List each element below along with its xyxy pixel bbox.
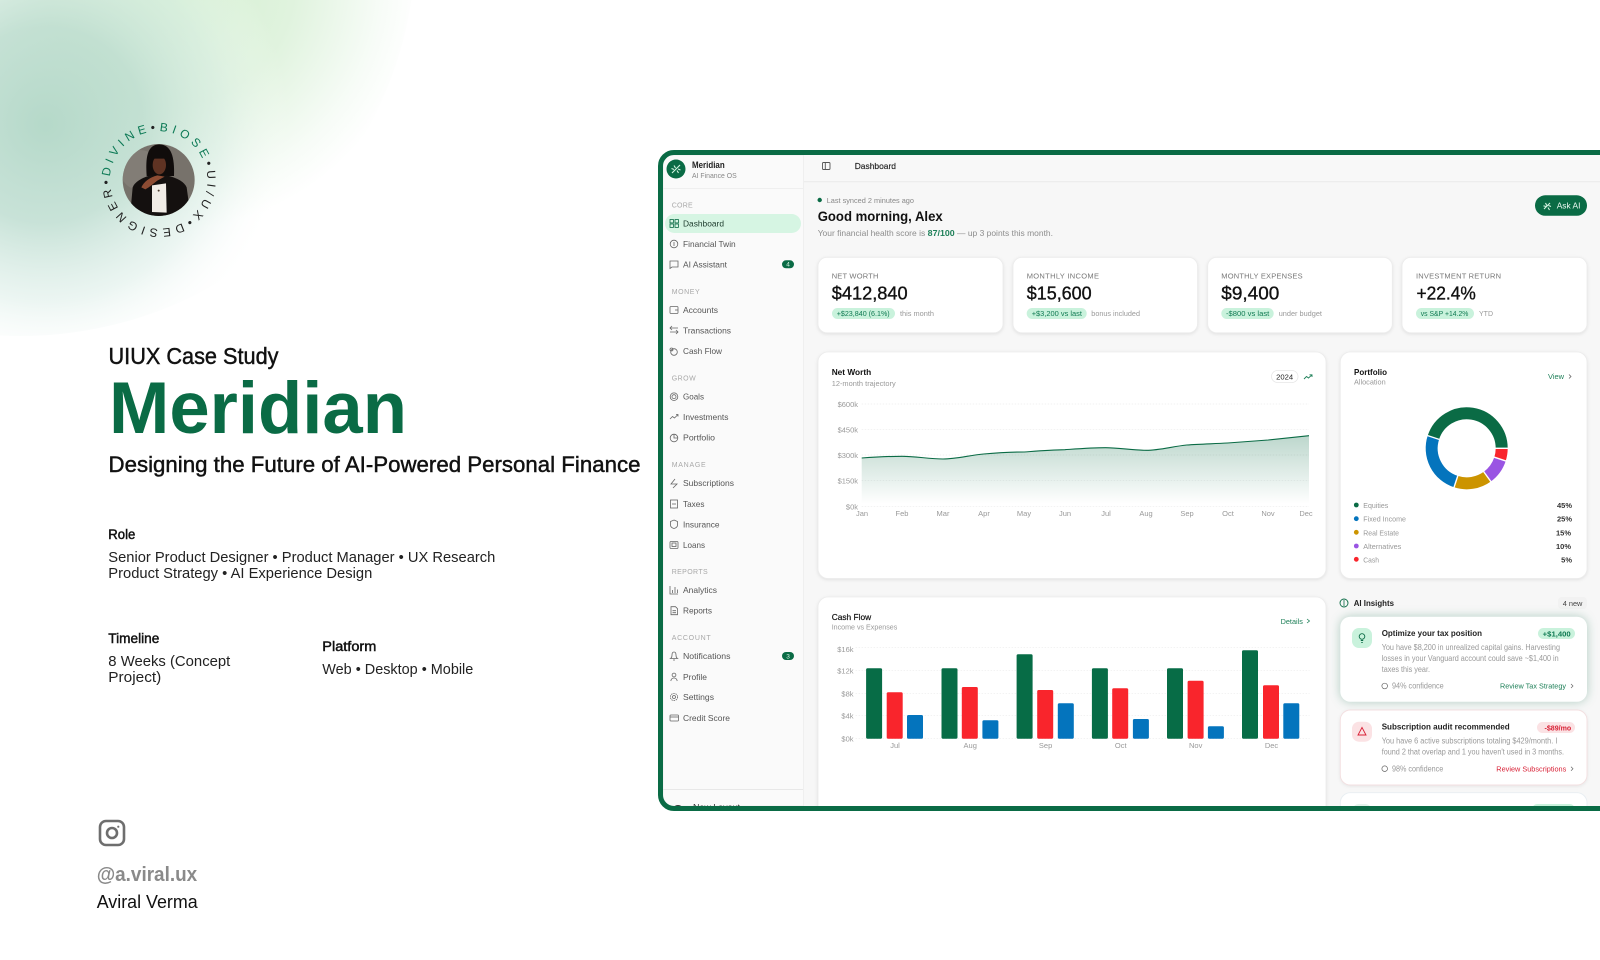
sidebar footer, cropped bbox=[674, 804, 740, 806]
KPI card: investment return: INVESTMENT RETURN bbox=[1416, 272, 1501, 281]
nav item: Insurance: Insurance bbox=[683, 519, 720, 529]
nav group: account: ACCOUNT bbox=[672, 635, 711, 642]
nav item: Cash Flow: Cash Flow bbox=[683, 346, 723, 356]
KPI card: monthly expenses: -$800 vs last bbox=[1226, 309, 1270, 318]
nav group: money: MONEY bbox=[672, 289, 700, 296]
line chart: Jul bbox=[1101, 509, 1111, 518]
line chart: $300k bbox=[838, 451, 858, 460]
dashboard mockup frame bbox=[660, 152, 1600, 853]
bar chart: $8k bbox=[841, 689, 854, 698]
KPI card: net worth: +$23,840 (6.1%) bbox=[837, 309, 890, 318]
nav group: grow bbox=[670, 376, 728, 443]
title: Meridian: Meridian bbox=[109, 368, 407, 449]
sidebar footer, cropped: New Layout bbox=[693, 802, 741, 812]
bar chart: Sep bbox=[1039, 741, 1052, 750]
top bar bbox=[804, 162, 1600, 182]
nav group: reports bbox=[670, 569, 717, 616]
insight card: subscription audit: Subscription audit recommended bbox=[1382, 722, 1510, 732]
nav item: Analytics: Analytics bbox=[683, 585, 717, 595]
link: view: View bbox=[1548, 372, 1565, 381]
bar chart: $12k bbox=[837, 666, 854, 675]
bars: Dec bbox=[1242, 650, 1299, 739]
nav group: account bbox=[670, 635, 794, 723]
nav item: Financial Twin: Financial Twin bbox=[683, 239, 736, 249]
line chart bbox=[838, 400, 1313, 518]
year selector: 2024 bbox=[1276, 372, 1293, 382]
platform block: Web • Desktop • Mobile bbox=[322, 661, 473, 678]
role block: Product Strategy • AI Experience Design bbox=[108, 565, 372, 582]
line chart: $600k bbox=[838, 400, 858, 409]
line chart: Nov bbox=[1261, 509, 1275, 518]
donut legend: 45% bbox=[1557, 501, 1572, 510]
nav item: Taxes: Taxes bbox=[683, 499, 704, 509]
AI insights heading: 4 new bbox=[1563, 599, 1583, 608]
KPI card: net worth bbox=[818, 257, 1003, 333]
line chart: Sep bbox=[1180, 509, 1194, 518]
bars: Jul bbox=[866, 668, 923, 739]
timeline block: 8 Weeks (Concept bbox=[108, 653, 231, 670]
insight card: cropped third card bbox=[1340, 793, 1587, 853]
logo: AI Finance OS bbox=[692, 171, 737, 180]
nav item: Accounts: Accounts bbox=[683, 305, 718, 315]
frame border bbox=[660, 152, 1600, 808]
bars: Aug bbox=[942, 668, 998, 739]
platform block bbox=[322, 639, 473, 678]
nav item: Transactions: Transactions bbox=[683, 326, 731, 336]
nav item: Reports: Reports bbox=[683, 606, 712, 616]
insight card: subscription audit: You have 6 active subscriptions totaling $429/month. I bbox=[1382, 736, 1557, 746]
chart heading: Net Worth bbox=[832, 367, 871, 377]
author name: Aviral Verma bbox=[97, 892, 199, 912]
line chart: Feb bbox=[896, 509, 908, 518]
KPI card: monthly expenses bbox=[1208, 257, 1392, 333]
line chart: Oct bbox=[1222, 509, 1235, 518]
icon: panel toggle bbox=[822, 162, 830, 170]
role block: Senior Product Designer • Product Manager • UX Research bbox=[108, 549, 495, 566]
line chart: Jun bbox=[1059, 509, 1071, 518]
greeting: Good morning, Alex bbox=[818, 208, 943, 224]
tag: +$1,400: +$1,400 bbox=[1543, 629, 1571, 638]
donut legend: 5% bbox=[1561, 555, 1572, 564]
KPI card: monthly expenses: $9,400 bbox=[1221, 282, 1279, 304]
button: Ask AI bbox=[1535, 195, 1587, 216]
donut legend: Fixed Income bbox=[1363, 515, 1406, 524]
panel: cash flow chart bbox=[818, 597, 1326, 837]
tag: -$89/mo bbox=[1537, 722, 1575, 733]
role block bbox=[108, 527, 495, 582]
KPI card: net worth: this month bbox=[900, 309, 934, 318]
subtitle: Designing the Future of AI-Powered Personal Finance bbox=[108, 452, 640, 477]
greeting: 87/100 bbox=[928, 228, 955, 238]
tag: -$89/mo: -$89/mo bbox=[1544, 723, 1572, 732]
panel: portfolio bbox=[1340, 352, 1587, 578]
nav item: Loans: Loans bbox=[683, 540, 705, 550]
confidence: 94% confidence bbox=[1392, 682, 1444, 691]
insight card: tax position: losses in your Vanguard account could save ~$1,400 in bbox=[1382, 654, 1559, 663]
nav item: Notifications: Notifications bbox=[683, 651, 730, 661]
donut legend: 15% bbox=[1556, 528, 1571, 537]
bars: Nov bbox=[1167, 668, 1224, 739]
handle: @a.viral.ux bbox=[97, 864, 197, 886]
nav item: AI Assistant bbox=[670, 259, 794, 269]
insight card: tax position bbox=[1340, 617, 1587, 702]
cash flow heading: Income vs Expenses bbox=[832, 622, 898, 632]
donut legend bbox=[1354, 501, 1572, 564]
bars: Oct bbox=[1092, 668, 1149, 739]
KPI card: monthly income: bonus included bbox=[1091, 309, 1140, 318]
tag: +$1,400 bbox=[1538, 628, 1575, 639]
nav item: Portfolio: Portfolio bbox=[683, 433, 715, 443]
bar chart: Oct bbox=[1115, 741, 1127, 750]
insight card: subscription audit: found 2 that overlap and 1 you haven't used in 3 months. bbox=[1382, 748, 1564, 756]
KPI card: investment return: +22.4% bbox=[1416, 282, 1476, 304]
bar chart: $4k bbox=[841, 712, 854, 721]
screen content bbox=[663, 155, 1600, 853]
timeline block bbox=[108, 631, 231, 686]
bar chart: Aug bbox=[964, 741, 977, 750]
line chart: May bbox=[1017, 509, 1031, 518]
eyebrow: UIUX Case Study: UIUX Case Study bbox=[108, 343, 279, 369]
timeline block: Timeline bbox=[108, 631, 159, 646]
KPI card: investment return: YTD bbox=[1479, 309, 1494, 318]
nav item: Notifications: 3 bbox=[786, 653, 790, 660]
icon: lightbulb bbox=[1352, 628, 1372, 648]
icon: warning bbox=[1352, 722, 1372, 742]
line chart: $150k bbox=[838, 477, 858, 486]
nav group: core bbox=[665, 202, 801, 269]
chart heading: 12-month trajectory bbox=[832, 379, 896, 388]
year selector bbox=[1272, 370, 1298, 382]
bar chart bbox=[837, 645, 1310, 750]
icon: trend arrow bbox=[1304, 375, 1312, 379]
donut legend: Alternatives bbox=[1363, 542, 1402, 551]
nav group: core: CORE bbox=[672, 202, 693, 210]
portfolio heading: Allocation bbox=[1354, 378, 1386, 386]
platform block: Platform bbox=[322, 639, 376, 654]
nav item: AI Assistant: AI Assistant bbox=[683, 259, 728, 269]
donut chart bbox=[1426, 413, 1509, 489]
insight card: tax position: taxes this year. bbox=[1382, 665, 1430, 674]
KPI card: monthly income: $15,600 bbox=[1027, 282, 1092, 304]
confidence: 98% confidence bbox=[1392, 764, 1443, 774]
portfolio heading bbox=[1354, 367, 1387, 386]
line chart: $0k bbox=[846, 502, 858, 511]
nav group: money bbox=[670, 289, 731, 356]
KPI card: net worth: $412,840 bbox=[832, 282, 908, 304]
logo bbox=[666, 160, 737, 180]
nav group: manage: MANAGE bbox=[672, 462, 706, 469]
bar chart: $0k bbox=[841, 735, 854, 744]
nav item: Dashboard active: Dashboard bbox=[683, 218, 724, 228]
avatar portrait bbox=[122, 144, 195, 216]
insight card: tax position: Optimize your tax position bbox=[1382, 628, 1482, 638]
link: details: Details bbox=[1281, 617, 1303, 626]
panel: net worth chart bbox=[818, 352, 1326, 578]
line chart: Apr bbox=[978, 509, 990, 518]
insight card: tax position: You have $8,200 in unrealized capital gains. Harvesting bbox=[1382, 643, 1560, 652]
bar chart: Nov bbox=[1189, 741, 1203, 750]
nav item: Profile: Profile bbox=[683, 672, 707, 682]
line chart: Mar bbox=[937, 509, 950, 518]
link: review subscriptions: Review Subscriptions bbox=[1496, 764, 1567, 774]
nav item: Settings: Settings bbox=[683, 692, 714, 702]
donut legend: 10% bbox=[1556, 542, 1571, 551]
nav item: Investments: Investments bbox=[683, 412, 728, 422]
logo: Meridian bbox=[692, 160, 725, 170]
nav group: reports: REPORTS bbox=[672, 569, 708, 576]
bar chart: Jul bbox=[890, 741, 900, 750]
KPI card: investment return bbox=[1402, 257, 1587, 333]
portfolio heading: Portfolio bbox=[1354, 367, 1387, 377]
icon: instagram bbox=[100, 821, 124, 845]
breadcrumb: Dashboard bbox=[855, 161, 896, 171]
greeting: Last synced 2 minutes ago bbox=[827, 196, 914, 205]
KPI card: monthly expenses: under budget bbox=[1279, 309, 1323, 318]
cash flow heading bbox=[832, 612, 898, 632]
donut legend: Equities bbox=[1363, 501, 1389, 510]
insight card: subscription audit bbox=[1340, 710, 1587, 785]
KPI card: monthly income: +$3,200 vs last bbox=[1032, 309, 1083, 318]
bars: Sep bbox=[1017, 654, 1074, 739]
greeting: — up 3 points this month. bbox=[957, 228, 1053, 238]
timeline block: Project) bbox=[108, 669, 161, 686]
designer badge bbox=[102, 122, 216, 237]
KPI card: net worth: NET WORTH bbox=[832, 272, 878, 281]
line chart: $450k bbox=[838, 425, 858, 434]
button: Ask AI: Ask AI bbox=[1557, 200, 1580, 210]
AI insights heading bbox=[1340, 597, 1587, 609]
bar chart: $16k bbox=[837, 645, 854, 654]
nav group: grow: GROW bbox=[672, 376, 696, 382]
bar chart: Dec bbox=[1265, 741, 1278, 750]
KPI card: investment return: vs S&P +14.2% bbox=[1421, 309, 1469, 318]
KPI card: monthly income bbox=[1013, 257, 1198, 333]
circular badge text: DIVINE•BIOSE•UI/UX•DESIGNER• bbox=[102, 122, 216, 237]
AI insights heading: AI Insights bbox=[1354, 598, 1394, 608]
donut legend: Cash bbox=[1363, 555, 1379, 564]
role block: Role bbox=[108, 527, 135, 542]
KPI card: monthly expenses: MONTHLY EXPENSES bbox=[1221, 272, 1303, 281]
nav item: Notifications bbox=[670, 651, 794, 661]
line chart: Dec bbox=[1299, 509, 1313, 518]
donut legend: Real Estate bbox=[1363, 528, 1399, 537]
background green gradient blob bbox=[0, 0, 380, 326]
nav item: Goals: Goals bbox=[683, 392, 704, 402]
KPI card: monthly income: MONTHLY INCOME bbox=[1027, 272, 1099, 281]
line chart: Aug bbox=[1139, 509, 1153, 518]
link: review tax strategy: Review Tax Strategy bbox=[1500, 682, 1566, 691]
cash flow heading: Cash Flow bbox=[832, 612, 872, 622]
nav group: manage bbox=[670, 462, 734, 550]
donut legend: 25% bbox=[1557, 515, 1572, 524]
nav item: Subscriptions: Subscriptions bbox=[683, 478, 734, 488]
nav item: Credit Score: Credit Score bbox=[683, 713, 730, 723]
line chart: Jan bbox=[856, 509, 868, 518]
greeting bbox=[818, 196, 1053, 238]
panel: sidebar bbox=[663, 155, 804, 817]
greeting: Your financial health score is bbox=[818, 228, 925, 238]
nav item: AI Assistant: 4 bbox=[786, 262, 790, 269]
chart heading bbox=[832, 367, 896, 388]
